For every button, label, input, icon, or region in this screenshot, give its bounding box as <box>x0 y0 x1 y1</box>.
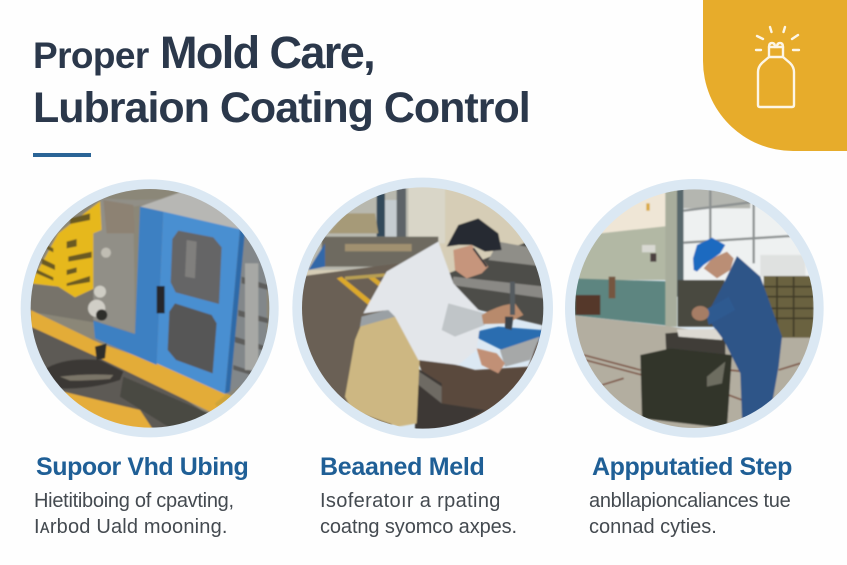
photo circle: worker coating mold <box>292 178 553 438</box>
column 1 text: Iᴀrbod Uald mooning. <box>34 516 228 538</box>
title: Lubraion Coating Control <box>33 84 530 132</box>
column 2 text: coatng syomco axpes. <box>320 516 517 538</box>
column 2 text: Isoferatoır a rpating <box>320 490 501 512</box>
column 1 heading: Supoor Vhd Ubing <box>36 453 248 481</box>
column 3 heading: Appputatied Step <box>592 453 792 481</box>
column 3 text: connad cyties. <box>589 516 717 538</box>
column 3 text: anbllapioncaliances tue <box>589 490 790 512</box>
photo circle: mold machine <box>20 179 280 440</box>
corner badge with spray bottle icon <box>703 0 847 151</box>
column 2 text <box>320 490 517 538</box>
column 1 text: Hietitiboing of cpavting, <box>34 490 234 512</box>
column 1 text <box>34 490 234 538</box>
title: Proper <box>33 35 149 76</box>
column 3 text <box>589 490 790 538</box>
title <box>33 27 530 132</box>
icon: spray bottle <box>756 27 799 107</box>
title accent rule <box>33 153 91 157</box>
column 2 heading: Beaaned Meld <box>320 453 485 481</box>
title: Mold Care, <box>160 27 374 78</box>
photo circle: technician at mold <box>565 179 824 438</box>
